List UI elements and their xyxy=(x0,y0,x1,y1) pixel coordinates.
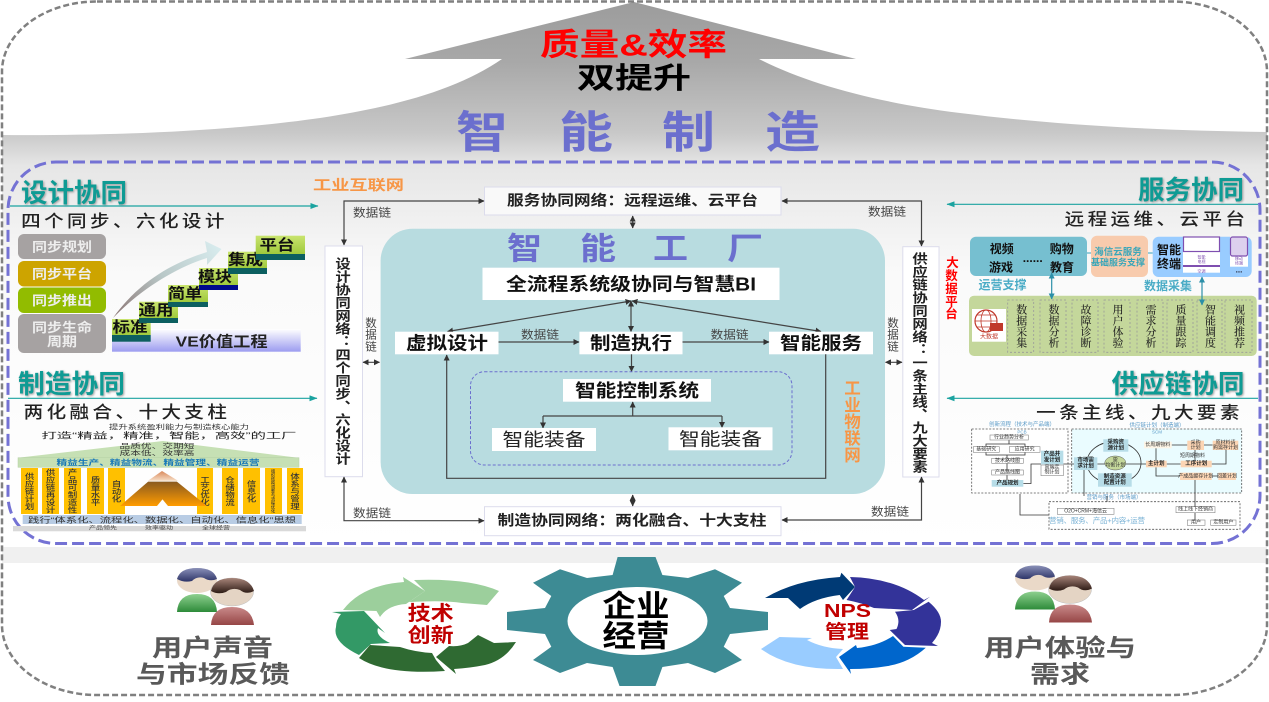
pillars: 体系与管理 xyxy=(289,472,301,510)
box: smart terminals: 智能 xyxy=(1198,254,1206,260)
diagram: supply chain flow: SCM xyxy=(1152,430,1162,434)
teal panel background xyxy=(381,229,885,494)
labels: data chain: 数据链 xyxy=(353,506,392,520)
sync list: 周期 xyxy=(47,334,77,349)
label: industrial IoT: 业 xyxy=(844,396,861,415)
subheading: four sync six design: 四个同步、六化设计 xyxy=(21,211,228,231)
panel: service collaboration xyxy=(947,175,1258,356)
panel: supply chain collaboration xyxy=(947,369,1258,529)
box: service network: 服务协同网络：远程运维、云平台 xyxy=(507,192,758,210)
diagram: supply chain flow: 技术路线图 xyxy=(995,457,1020,464)
heading: smart factory: 厂 xyxy=(727,232,763,266)
diagram: supply chain flow: 制计划 xyxy=(1044,469,1060,476)
diagram: supply chain flow: 高端定 xyxy=(1044,464,1060,471)
dashed control area xyxy=(470,372,792,465)
diagram: supply chain flow: 创新流程（技术与产品端） xyxy=(989,420,1055,428)
label: enterprise: 企业 xyxy=(602,590,670,624)
box: smart control system xyxy=(563,379,711,402)
practice bar xyxy=(23,514,302,524)
sync list: 同步推出 xyxy=(32,293,92,308)
lean band xyxy=(18,457,299,467)
diagram: supply chain flow: 产品并 xyxy=(1044,450,1061,458)
diagram: supply chain flow: 市场需 xyxy=(1077,456,1094,464)
box: SCM area xyxy=(1072,429,1242,493)
heading: double improvement: 双提升 xyxy=(577,62,691,95)
box: service network xyxy=(484,187,781,215)
pillars: 供应链计划 xyxy=(24,472,35,510)
label: industrial IoT: 工 xyxy=(844,380,861,398)
green roof xyxy=(18,441,298,458)
subheading: remote ops and cloud: 远程运维、云平台 xyxy=(1065,209,1248,229)
lean band: 精益生产、精益物流、精益管理、精益运营 xyxy=(56,457,260,467)
arrow: manufacturing rule xyxy=(8,397,317,399)
big data panel: 智能调度 xyxy=(1204,303,1216,349)
icon: technology innovation cycle xyxy=(332,577,516,674)
connectors: network arrows xyxy=(344,201,922,521)
pillars: 组织结构调整与流程优化 xyxy=(271,468,276,514)
big data panel: 数据分析 xyxy=(1047,303,1060,349)
heading: smart factory: 能 xyxy=(580,232,616,266)
arrows: BI to three modules xyxy=(448,301,821,332)
title: intelligent manufacturing: 能 xyxy=(559,108,613,158)
labels: data chain: 数据链 xyxy=(353,205,392,219)
box: manufacturing execution: 制造执行 xyxy=(590,334,672,354)
arrow: rising curve xyxy=(113,241,222,318)
label: big data platform: 台 xyxy=(945,306,958,321)
label: industrial IoT: 物 xyxy=(844,413,861,432)
label: data collection: 数据采集 xyxy=(1144,278,1192,293)
stair steps: 通用 xyxy=(138,302,174,319)
box: smart terminals: 智能 xyxy=(1157,242,1181,257)
box: hisense cloud xyxy=(1091,236,1148,277)
label: operations: 经营 xyxy=(602,620,670,654)
big data panel: 视频推荐 xyxy=(1232,304,1245,349)
box: marketing area xyxy=(1049,502,1240,529)
box: virtual design xyxy=(395,332,498,354)
footer grey bar: 效率驱动 xyxy=(145,525,173,532)
box: content services xyxy=(970,237,1087,276)
box: manufacturing network: 制造协同网络：两化融合、十大支柱 xyxy=(498,512,767,530)
box: smart terminals: ... xyxy=(1236,266,1242,274)
box: PCB area xyxy=(972,429,1068,493)
icon: gear xyxy=(507,557,768,686)
arrow: execution to control xyxy=(630,354,632,372)
label: operations support: 运营支撑 xyxy=(978,277,1027,292)
arrows: equipment to control xyxy=(543,402,722,428)
icon: users left xyxy=(177,568,254,625)
VE value engineering bar: VE价值工程 xyxy=(176,334,268,350)
title: intelligent manufacturing: 制 xyxy=(662,108,715,158)
box: smart terminals: 终端 xyxy=(1235,260,1243,266)
heading: smart factory xyxy=(507,232,763,266)
arrow: design to execution xyxy=(498,341,579,343)
label: data chain: 数据链 xyxy=(711,328,749,342)
diagram: supply chain flow: 产成品缓存计划 xyxy=(1178,472,1213,479)
stair steps: 集成 xyxy=(228,250,263,268)
box: full process BI xyxy=(482,268,780,300)
pillars xyxy=(21,468,303,514)
arrow: service rule xyxy=(947,203,1258,205)
box: smart terminals xyxy=(1153,237,1252,277)
pillars: 产品可制造性 xyxy=(67,468,78,514)
diagram: supply chain flow: 发计划 xyxy=(1044,456,1061,464)
diagram: supply chain flow: 原材料请 xyxy=(1215,439,1236,446)
label: technology: 技术 xyxy=(408,602,454,625)
diagram: supply chain flow: 求计划 xyxy=(1077,462,1094,470)
arrow: operations to data xyxy=(1051,273,1053,299)
box: content services: 视频 xyxy=(990,241,1014,256)
big data panel: 故障诊断 xyxy=(1079,303,1092,349)
diagram: supply chain flow: 基础研究 xyxy=(976,446,996,453)
diagram: supply chain flow: 供应链计划（制造端） xyxy=(1129,421,1185,429)
labels: data chain: 数 xyxy=(887,316,899,330)
diagram: supply chain flow: O2O+CRM+海信云 xyxy=(1064,507,1107,514)
label: big data platform: 平 xyxy=(945,295,958,309)
background: grey roof shape xyxy=(2,2,1267,547)
heading: supply chain collaboration: 供应链协同 xyxy=(1112,369,1244,399)
diagram: supply chain flow: 配置计划 xyxy=(1104,478,1126,486)
footer grey bar: 全球经营 xyxy=(202,525,230,532)
sync list xyxy=(18,234,106,353)
arrow: terminals to data xyxy=(1201,277,1203,305)
label: industrial IoT: 网 xyxy=(844,447,861,465)
diagram: supply chain flow: PCB xyxy=(1017,429,1027,434)
big data panel xyxy=(969,296,1257,356)
box: content services: 教育 xyxy=(1050,260,1074,275)
box: content services: ...... xyxy=(1023,251,1043,265)
label: industrial IoT: 联 xyxy=(844,429,861,448)
box: supply chain network: 供应链协同网络：一条主线、九大要素 xyxy=(910,252,928,473)
stair steps: 模块 xyxy=(198,268,232,286)
labels: data chain xyxy=(353,205,910,520)
sync list: 同步平台 xyxy=(32,266,92,282)
box: smart control system: 智能控制系统 xyxy=(575,380,699,401)
diagram: supply chain flow: 制造资源 xyxy=(1104,472,1126,480)
diagram: supply chain flow: 主计划 xyxy=(1148,459,1165,467)
pillars: 信息化 xyxy=(246,479,257,503)
diagram: supply chain flow: 工序计划 xyxy=(1185,459,1208,467)
diagram: supply chain flow: 购需存计划 xyxy=(1213,444,1238,451)
stair steps: 简单 xyxy=(168,284,202,302)
labels: data chain: 链 xyxy=(887,339,899,353)
sync list: 同步生命 xyxy=(32,320,92,335)
box: design network: 设计协同网络：四个同步、六化设计 xyxy=(333,257,351,466)
diagram: supply chain flow: 源计划 xyxy=(1108,444,1125,452)
heading: smart factory: 智 xyxy=(507,232,542,266)
label: big data platform: 数 xyxy=(945,268,958,283)
box: smart equipment right xyxy=(668,427,772,450)
label: market feedback: 与市场反馈 xyxy=(136,662,290,688)
box: smart equipment left xyxy=(492,428,596,451)
icon: NPS cycle xyxy=(761,573,941,674)
heading: quality and efficiency: 质量&效率 xyxy=(540,28,727,62)
box: design network xyxy=(325,246,362,477)
diagram: supply chain flow: 产品路线图 xyxy=(995,469,1020,476)
band: separator strip xyxy=(2,547,1267,563)
diagram: supply chain flow: 用户 xyxy=(1191,519,1201,526)
labels: data chain: 数 xyxy=(365,316,377,330)
heading: service collaboration: 服务协同 xyxy=(1138,175,1244,205)
box: smart equipment left: 智能装备 xyxy=(502,430,586,450)
heading: manufacturing collaboration: 制造协同 xyxy=(18,369,125,399)
labels: data chain: 数据链 xyxy=(871,505,910,519)
big data panel: 用户体验 xyxy=(1111,304,1124,348)
diagram: supply chain flow: 应用研究 xyxy=(1015,446,1035,453)
purple dashed main frame xyxy=(8,162,1260,544)
label: big data platform xyxy=(945,255,959,321)
pillars: 供应链再设计 xyxy=(45,468,56,514)
label: user experience: 用户体验与 xyxy=(984,634,1136,662)
panel: manufacturing collaboration xyxy=(8,369,317,532)
labels: data chain: 据 xyxy=(365,328,377,342)
title: intelligent manufacturing xyxy=(456,108,820,158)
box: virtual design: 虚拟设计 xyxy=(406,334,488,354)
diagram: supply chain flow: 采购 xyxy=(1191,439,1201,446)
label: demand: 需求 xyxy=(1030,662,1090,688)
label: innovation: 创新 xyxy=(408,624,454,647)
icon: big data globe xyxy=(972,309,1006,342)
box: content services: 购物 xyxy=(1050,241,1074,256)
title: intelligent manufacturing: 造 xyxy=(765,108,820,158)
diagram: supply chain flow: 均衡计划 xyxy=(1105,462,1125,468)
box: content services: 游戏 xyxy=(989,260,1013,275)
stair steps xyxy=(112,236,305,342)
big data panel: 需求分析 xyxy=(1144,303,1156,349)
diagram: supply chain flow: 长周期物料 xyxy=(1145,441,1170,448)
diagram: supply chain flow: 营销、服务、产品+内容+运营 xyxy=(1049,515,1146,525)
subheading: two integrations ten pillars: 两化融合、十大支柱 xyxy=(24,402,230,422)
label: NPS: NPS xyxy=(824,601,871,621)
stair steps: 平台 xyxy=(260,236,294,254)
green roof: 成本低、效率高 xyxy=(120,448,195,457)
box: smart terminals: 终端 xyxy=(1157,256,1181,271)
label: big data platform: 据 xyxy=(945,282,958,296)
big data panel: 数据采集 xyxy=(1015,303,1027,349)
icon: big data globe: 大数据 xyxy=(980,333,998,341)
labels: data chain: 据 xyxy=(887,328,899,342)
panel: smart factory core xyxy=(381,229,885,494)
subheading: one line nine elements: 一条主线、九大要素 xyxy=(1036,403,1243,422)
pillars: 自动化 xyxy=(111,479,122,503)
arrow: supply chain rule xyxy=(947,397,1258,399)
diagram: supply chain flow xyxy=(972,420,1242,529)
box: manufacturing execution xyxy=(579,332,682,354)
diagram: supply chain flow: 需 xyxy=(1113,458,1118,464)
labels: data chain: 数据链 xyxy=(868,205,907,219)
box: smart service: 智能服务 xyxy=(780,332,862,354)
box: manufacturing network xyxy=(484,507,781,536)
diagram: supply chain flow: 行业趋势分析 xyxy=(994,434,1024,441)
box: smart equipment right: 智能装备 xyxy=(679,430,762,450)
icon: users right xyxy=(1015,566,1092,622)
VE value engineering bar xyxy=(112,329,301,352)
label: management: 管理 xyxy=(825,620,869,643)
panel: design collaboration xyxy=(10,178,318,353)
arrow: execution to service xyxy=(682,341,769,343)
box: smart terminals: 电视 xyxy=(1198,258,1206,264)
stair steps: 标准 xyxy=(112,319,148,336)
arrows: between service boxes xyxy=(1087,252,1153,254)
box: supply chain network xyxy=(903,247,939,477)
central mountain xyxy=(120,471,207,506)
green roof: 品质优、交期短 xyxy=(120,441,195,450)
flow lines xyxy=(986,440,1074,484)
label: industrial IoT xyxy=(844,380,861,465)
box: smart service xyxy=(769,332,873,354)
pillars: 质量水平 xyxy=(90,476,101,507)
tagline main: 打造“精益，精准，智能，高效”的工厂 xyxy=(42,431,296,441)
sync list: 同步规划 xyxy=(32,240,92,254)
heading: design collaboration: 设计协同 xyxy=(21,178,127,208)
diagram: supply chain flow: 线上线下经销商 xyxy=(1178,506,1213,513)
box: hisense cloud: 基础服务支撑 xyxy=(1091,257,1145,268)
label: data chain: 数据链 xyxy=(521,328,560,342)
heading: smart factory: 工 xyxy=(653,232,688,266)
diagram: supply chain flow: 计划 xyxy=(1191,444,1201,451)
big data panel: 质量跟踪 xyxy=(1174,303,1186,348)
box: hisense cloud: 海信云服务 xyxy=(1094,246,1142,258)
label: user voice: 用户声音 xyxy=(152,635,273,662)
label: big data platform: 大 xyxy=(946,255,959,270)
diagram: supply chain flow: 营销与服务（市场端） xyxy=(1086,493,1142,501)
footer grey bar: 产品领先 xyxy=(89,525,117,532)
diagram: supply chain flow: 回差计划 xyxy=(1217,472,1237,479)
arrow: feedback loop xyxy=(447,354,826,478)
box: smart terminals: 移动 xyxy=(1235,255,1243,261)
diagram: supply chain flow: 产品规划 xyxy=(996,478,1019,486)
practice bar: 践行“体系化、流程化、数据化、自动化、信息化”思想 xyxy=(28,514,297,524)
pillars: 仓储物流 xyxy=(224,476,236,507)
diagram: supply chain flow: 短周期物料 xyxy=(1180,452,1205,459)
tagline small: 提升系统盈利能力与制造核心能力 xyxy=(109,422,249,431)
box: full process BI: 全流程系统级协同与智慧BI xyxy=(506,274,756,294)
title: intelligent manufacturing: 智 xyxy=(456,108,508,158)
pillars: 工艺优化 xyxy=(199,476,211,507)
labels: data chain: 链 xyxy=(365,339,377,353)
footer grey bar xyxy=(13,525,306,532)
arrow: design rule xyxy=(10,205,318,207)
label: industrial internet: 工业互联网 xyxy=(313,177,404,193)
diagram: supply chain flow: 采购资 xyxy=(1108,438,1125,446)
diagram: supply chain flow: 定制用户 xyxy=(1213,519,1233,526)
box: smart terminals: 空调 xyxy=(1198,268,1206,274)
